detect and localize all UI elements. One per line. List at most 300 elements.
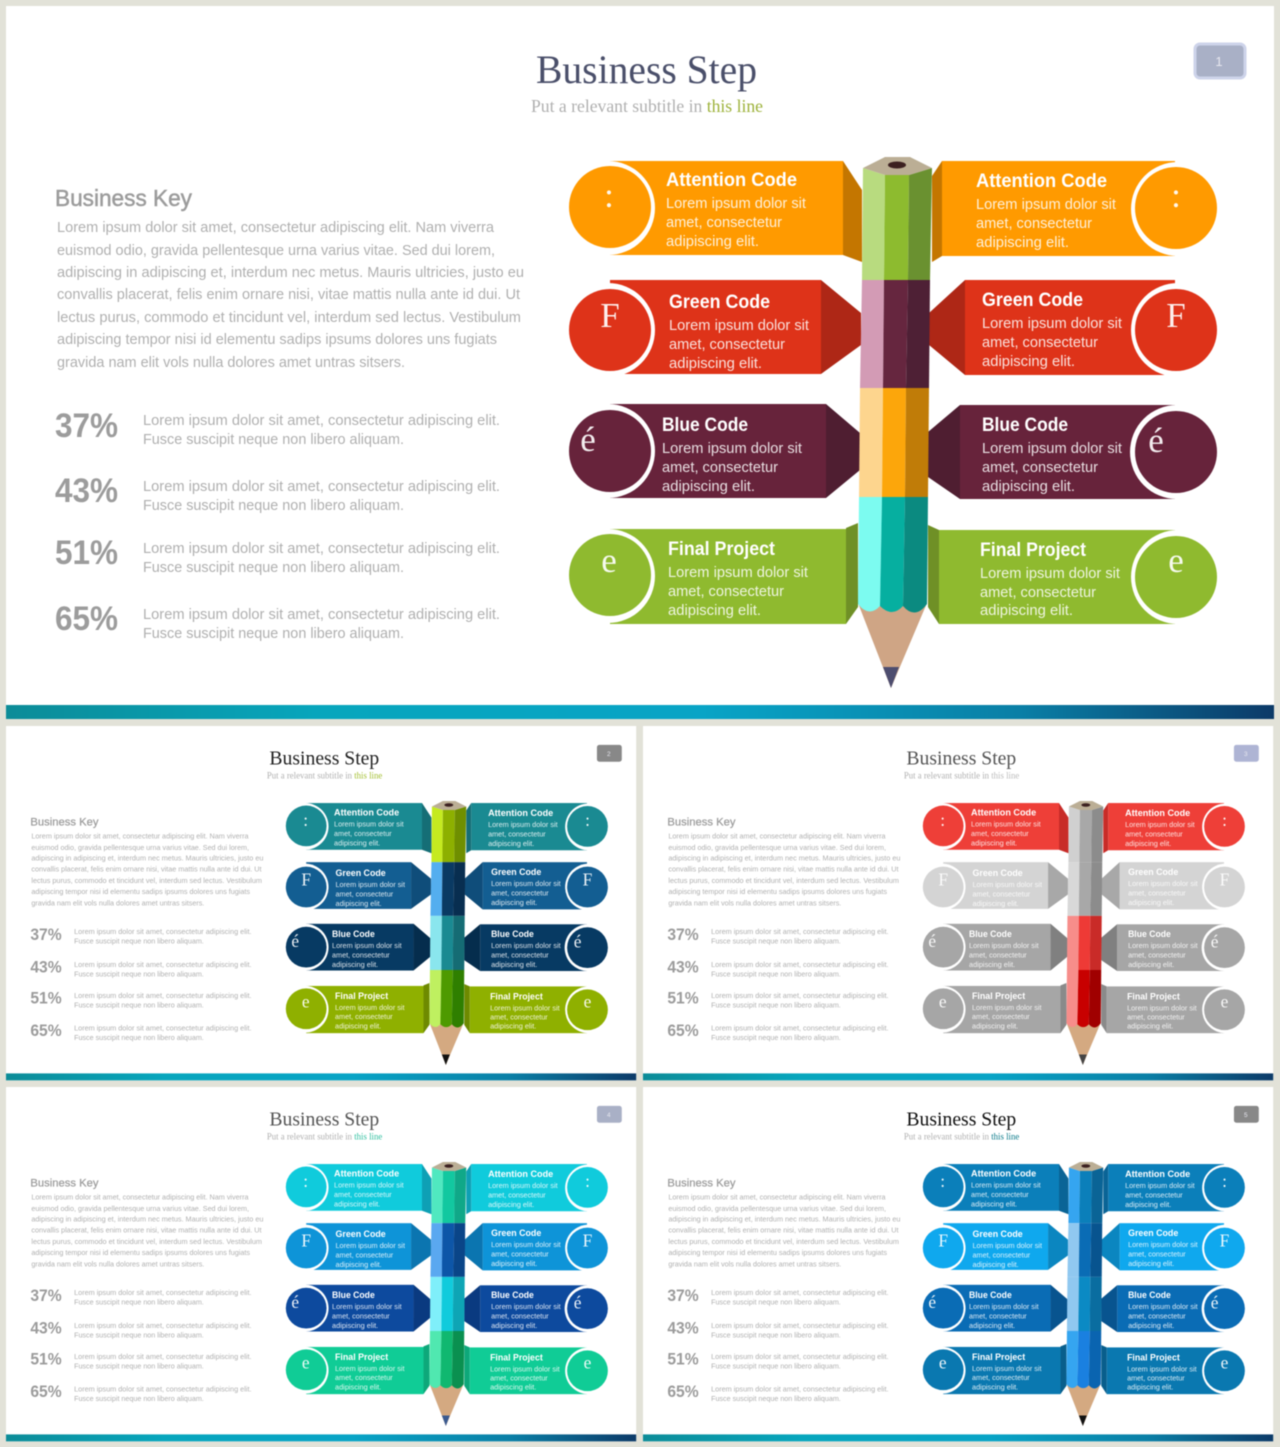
stat 37%: Fusce suscipit neque non libero aliquam. [711, 1298, 841, 1307]
stat 37%: Lorem ipsum dolor sit amet, consectetur adipiscing elit. [74, 1288, 252, 1297]
pencil [1066, 1162, 1103, 1426]
stat 43%: Lorem ipsum dolor sit amet, consectetur adipiscing elit. [711, 1321, 889, 1330]
main slide [6, 6, 1274, 719]
banner left: attention code: Attention Code [666, 170, 797, 191]
business key paragraph: euismod odio, gravida pellentesque urna varius vitae. Sed dui lorem, [668, 1204, 886, 1213]
stat 37% [30, 1286, 252, 1307]
banner left: blue code: Lorem ipsum dolor sit [969, 941, 1039, 950]
business key paragraph: lectus purus, commodo et tincidunt vel, interdum sed lectus. Vestibulum [668, 1237, 899, 1246]
stat 51%: 51% [667, 1349, 699, 1368]
banner left: green code: Lorem ipsum dolor sit [336, 1241, 405, 1250]
banner left: final project: amet, consectetur [668, 584, 784, 600]
stat 43%: Lorem ipsum dolor sit amet, consectetur adipiscing elit. [143, 479, 500, 495]
title: Business Step [269, 1108, 379, 1130]
banner right: attention code: amet, consectetur [1125, 1190, 1183, 1199]
banner right: final project: Lorem ipsum dolor sit [1127, 1364, 1197, 1373]
business key paragraph: lectus purus, commodo et tincidunt vel, interdum sed lectus. Vestibulum [57, 310, 521, 326]
banner left: attention code: amet, consectetur [334, 1190, 392, 1199]
stat 37%: Lorem ipsum dolor sit amet, consectetur adipiscing elit. [74, 927, 252, 936]
stat 65%: Lorem ipsum dolor sit amet, consectetur adipiscing elit. [711, 1024, 889, 1033]
stat 43% [667, 1319, 889, 1339]
banner left: green code [282, 862, 431, 910]
stat 37%: Fusce suscipit neque non libero aliquam. [74, 1298, 204, 1307]
subtitle: Put a relevant subtitle in this line [531, 96, 763, 116]
banner left: final project: amet, consectetur [972, 1012, 1030, 1021]
banner left: green code: Green Code [669, 292, 770, 313]
business key paragraph: convallis placerat, felis enim ornare nisi, vitae mattis nulla ante id dui. Ut [668, 865, 898, 874]
pencil [429, 801, 466, 1065]
banner right: final project: Final Project [980, 540, 1087, 561]
banner right: final project: adipiscing elit. [980, 603, 1073, 619]
stat 51%: Fusce suscipit neque non libero aliquam. [711, 1361, 841, 1370]
stat 37%: 37% [30, 925, 62, 944]
banner left: green code: adipiscing elit. [336, 1260, 382, 1269]
page badge [1234, 1106, 1259, 1123]
banner left: green code: F [301, 1232, 311, 1251]
business key heading: Business Key [667, 816, 736, 828]
business key paragraph: Lorem ipsum dolor sit amet, consectetur adipiscing elit. Nam viverra [668, 1192, 886, 1201]
banner left: green code: adipiscing elit. [669, 356, 762, 372]
banner right: green code: amet, consectetur [491, 1249, 549, 1258]
stat 43% [667, 958, 889, 978]
banner right: green code: F [1166, 296, 1186, 335]
stat 51% [30, 988, 252, 1009]
banner right: attention code [932, 161, 1225, 262]
business key paragraph: convallis placerat, felis enim ornare nisi, vitae mattis nulla ante id dui. Ut [31, 865, 261, 874]
page badge [597, 1106, 622, 1123]
banner left: blue code [282, 924, 430, 971]
business key paragraph: adipiscing tempor nisi id elementu sadips ipsums dolores uns fugiats [31, 1248, 250, 1257]
stat 51% [667, 988, 889, 1009]
banner left: attention code [919, 803, 1068, 853]
banner left: attention code: : [940, 811, 945, 830]
stat 65% [30, 1021, 252, 1042]
business key paragraph: adipiscing tempor nisi id elementu sadips ipsums dolores uns fugiats [31, 887, 250, 896]
banner left: attention code: Attention Code [971, 1168, 1036, 1179]
banner left: green code: Lorem ipsum dolor sit [336, 880, 405, 889]
banner right: attention code: amet, consectetur [488, 829, 546, 838]
banner left: blue code [282, 1285, 430, 1332]
banner right: green code [1102, 862, 1249, 910]
stat 51%: 51% [667, 988, 699, 1007]
stat 37%: 37% [667, 925, 699, 944]
mini slide: cyan and mint [6, 1087, 636, 1441]
banner right: final project: Final Project [1127, 991, 1181, 1002]
stat 43%: 43% [55, 472, 118, 510]
banner right: attention code: amet, consectetur [488, 1190, 546, 1199]
banner right: green code: adipiscing elit. [491, 898, 537, 907]
banner left: green code [282, 1223, 431, 1271]
banner left: blue code [919, 924, 1067, 971]
banner right: final project: adipiscing elit. [490, 1383, 536, 1392]
stat 51%: Fusce suscipit neque non libero aliquam. [711, 1000, 841, 1009]
banner right: final project: amet, consectetur [490, 1013, 548, 1022]
banner right: attention code: Lorem ipsum dolor sit [1125, 1181, 1195, 1190]
stat 51% [55, 534, 500, 576]
banner left: final project: e [302, 1353, 310, 1372]
banner right: final project: amet, consectetur [1127, 1374, 1185, 1383]
banner left: final project: adipiscing elit. [972, 1383, 1018, 1392]
stat 51%: Lorem ipsum dolor sit amet, consectetur adipiscing elit. [74, 1352, 252, 1361]
banner right: green code: Green Code [982, 290, 1083, 311]
stat 37% [30, 925, 252, 946]
banner left: blue code: Lorem ipsum dolor sit [332, 1302, 402, 1311]
banner right: blue code: Lorem ipsum dolor sit [1128, 941, 1198, 950]
business key paragraph: lectus purus, commodo et tincidunt vel, interdum sed lectus. Vestibulum [31, 1237, 262, 1246]
banner left: attention code: adipiscing elit. [971, 838, 1017, 847]
footer bar [6, 1073, 636, 1080]
banner right: blue code: é [1211, 1294, 1219, 1313]
banner right: green code [1102, 1223, 1249, 1271]
banner right: blue code: Blue Code [1128, 929, 1171, 940]
banner left: green code: F [938, 1232, 948, 1251]
stat 65%: Lorem ipsum dolor sit amet, consectetur adipiscing elit. [74, 1385, 252, 1394]
business key paragraph: Lorem ipsum dolor sit amet, consectetur adipiscing elit. Nam viverra [31, 831, 249, 840]
banner left: final project: e [601, 541, 617, 580]
banner left: attention code [561, 161, 862, 262]
banner right: attention code [466, 803, 612, 853]
title: Business Step [906, 1108, 1016, 1130]
business key paragraph: convallis placerat, felis enim ornare nisi, vitae mattis nulla ante id dui. Ut [57, 287, 520, 303]
banner right: green code: Lorem ipsum dolor sit [982, 316, 1122, 332]
banner right: attention code: adipiscing elit. [488, 839, 534, 848]
stat 37%: Lorem ipsum dolor sit amet, consectetur adipiscing elit. [711, 927, 889, 936]
banner left: attention code: amet, consectetur [971, 1190, 1029, 1199]
banner right: final project: Final Project [1127, 1352, 1181, 1363]
stat 37%: Lorem ipsum dolor sit amet, consectetur adipiscing elit. [711, 1288, 889, 1297]
stat 65%: Fusce suscipit neque non libero aliquam. [74, 1033, 204, 1042]
stat 51% [30, 1349, 252, 1370]
business key paragraph: adipiscing in adipiscing et, interdum nec metus. Mauris ultricies, justo eu [57, 265, 524, 281]
banner right: blue code: é [574, 933, 582, 952]
banner right: attention code: amet, consectetur [976, 216, 1092, 232]
banner left: final project: Lorem ipsum dolor sit [668, 565, 808, 581]
banner right: attention code: Attention Code [1125, 808, 1190, 819]
banner left: final project: Final Project [668, 539, 776, 560]
banner right: blue code: é [1148, 421, 1164, 460]
banner right: final project: Lorem ipsum dolor sit [490, 1364, 560, 1373]
stat 65% [667, 1021, 889, 1042]
subtitle: Put a relevant subtitle in this line [267, 771, 382, 781]
banner left: green code: Lorem ipsum dolor sit [973, 880, 1042, 889]
banner right: blue code: Blue Code [491, 1290, 534, 1301]
stat 65% [667, 1382, 889, 1403]
banner left: blue code: é [928, 932, 936, 951]
stat 65% [55, 600, 500, 642]
banner right: attention code: adipiscing elit. [1125, 1200, 1171, 1209]
banner left: attention code: Attention Code [334, 807, 399, 818]
banner right: final project: Final Project [490, 1352, 544, 1363]
banner left: final project [561, 523, 858, 624]
business key paragraph: adipiscing in adipiscing et, interdum nec metus. Mauris ultricies, justo eu [31, 1215, 263, 1224]
banner left: final project: Lorem ipsum dolor sit [972, 1003, 1042, 1012]
business key heading: Business Key [30, 816, 99, 828]
banner right: green code: amet, consectetur [982, 335, 1098, 351]
banner right: blue code: adipiscing elit. [491, 1321, 537, 1330]
banner left: blue code: amet, consectetur [662, 460, 778, 476]
stat 65%: 65% [30, 1382, 62, 1401]
business key paragraph: gravida nam elit vols nulla dolores amet untras sitsers. [31, 898, 204, 907]
banner right: attention code: Attention Code [488, 808, 553, 819]
banner right: final project: adipiscing elit. [1127, 1022, 1173, 1031]
banner right: blue code: adipiscing elit. [491, 960, 537, 969]
banner right: green code [929, 280, 1225, 377]
page badge: 2 [607, 751, 611, 758]
banner left: blue code: adipiscing elit. [332, 1321, 378, 1330]
stat 51%: 51% [30, 988, 62, 1007]
stat 37% [667, 925, 889, 946]
business key paragraph: Lorem ipsum dolor sit amet, consectetur adipiscing elit. Nam viverra [31, 1192, 249, 1201]
banner left: green code [919, 862, 1068, 910]
banner left: final project [282, 1344, 429, 1394]
banner left: attention code [919, 1164, 1068, 1214]
banner left: blue code: amet, consectetur [332, 1312, 390, 1321]
banner right: attention code: : [1222, 1172, 1227, 1191]
business key paragraph: adipiscing tempor nisi id elementu sadips ipsums dolores uns fugiats [57, 332, 497, 348]
mini slide: red and grey [643, 726, 1273, 1080]
banner left: blue code [919, 1285, 1067, 1332]
stat 51%: Lorem ipsum dolor sit amet, consectetur adipiscing elit. [143, 541, 500, 557]
page badge: 3 [1244, 751, 1248, 758]
banner right: final project: amet, consectetur [490, 1374, 548, 1383]
banner left: attention code: Lorem ipsum dolor sit [334, 1180, 404, 1189]
banner left: green code: adipiscing elit. [973, 899, 1019, 908]
stat 65%: 65% [667, 1382, 699, 1401]
banner left: attention code: Lorem ipsum dolor sit [334, 819, 404, 828]
stat 37%: Fusce suscipit neque non libero aliquam. [143, 432, 404, 448]
banner left: green code: adipiscing elit. [973, 1260, 1019, 1269]
banner right: blue code: amet, consectetur [491, 951, 549, 960]
title: Business Step [906, 747, 1016, 769]
banner right: green code: F [1220, 1232, 1230, 1251]
banner right: attention code: Lorem ipsum dolor sit [488, 1181, 558, 1190]
banner right: final project [464, 1345, 612, 1394]
business key paragraph: euismod odio, gravida pellentesque urna varius vitae. Sed dui lorem, [31, 843, 249, 852]
banner right: blue code [464, 924, 611, 971]
banner left: attention code [282, 803, 431, 853]
banner right: final project: e [584, 992, 592, 1011]
banner right: attention code [1103, 1164, 1249, 1214]
stat 43%: Fusce suscipit neque non libero aliquam. [74, 969, 204, 978]
banner left: green code: Green Code [336, 868, 386, 879]
business key paragraph: convallis placerat, felis enim ornare nisi, vitae mattis nulla ante id dui. Ut [668, 1226, 898, 1235]
banner right: blue code [1101, 1285, 1248, 1332]
banner right: final project: e [584, 1353, 592, 1372]
page badge [597, 745, 622, 762]
stat 37%: 37% [30, 1286, 62, 1305]
banner right: attention code: Lorem ipsum dolor sit [488, 820, 558, 829]
banner right: final project [1101, 984, 1249, 1033]
mini slide: teal and navy [6, 726, 636, 1080]
banner right: green code: Lorem ipsum dolor sit [491, 879, 561, 888]
banner left: final project [919, 983, 1066, 1033]
banner left: green code: amet, consectetur [669, 337, 785, 353]
stat 37% [667, 1286, 889, 1307]
banner left: attention code: amet, consectetur [334, 829, 392, 838]
banner left: green code: amet, consectetur [973, 1250, 1031, 1259]
banner right: blue code [1101, 924, 1248, 971]
banner left: green code: F [301, 871, 311, 890]
banner left: blue code: adipiscing elit. [662, 479, 755, 495]
banner left: final project: Lorem ipsum dolor sit [335, 1364, 405, 1373]
stat 43%: Fusce suscipit neque non libero aliquam. [143, 498, 404, 514]
stat 43%: 43% [667, 1319, 699, 1338]
banner left: final project: adipiscing elit. [972, 1022, 1018, 1031]
subtitle: Put a relevant subtitle in this line [904, 1132, 1019, 1142]
business key paragraph: adipiscing in adipiscing et, interdum nec metus. Mauris ultricies, justo eu [668, 1215, 900, 1224]
banner right: blue code: Lorem ipsum dolor sit [491, 1302, 561, 1311]
banner right: final project [928, 525, 1225, 624]
stat 65%: Lorem ipsum dolor sit amet, consectetur adipiscing elit. [74, 1024, 252, 1033]
banner right: blue code: Lorem ipsum dolor sit [1128, 1302, 1198, 1311]
stat 37%: Fusce suscipit neque non libero aliquam. [711, 937, 841, 946]
banner right: attention code: amet, consectetur [1125, 829, 1183, 838]
stat 43%: 43% [667, 958, 699, 977]
banner right: green code: amet, consectetur [491, 888, 549, 897]
mini slide: blues [643, 1087, 1273, 1441]
business key paragraph: gravida nam elit vols nulla dolores amet untras sitsers. [668, 1259, 841, 1268]
banner left: green code: Green Code [973, 1229, 1023, 1240]
banner left: attention code: Lorem ipsum dolor sit [666, 196, 806, 212]
banner right: attention code: adipiscing elit. [976, 235, 1069, 251]
stat 65%: Fusce suscipit neque non libero aliquam. [143, 626, 404, 642]
banner left: attention code: adipiscing elit. [666, 234, 759, 250]
banner left: blue code: Lorem ipsum dolor sit [969, 1302, 1039, 1311]
stat 37% [55, 407, 500, 448]
banner left: blue code: Blue Code [969, 929, 1012, 940]
banner right: final project: e [1221, 992, 1229, 1011]
banner left: blue code: é [291, 932, 299, 951]
stat 51% [667, 1349, 889, 1370]
stat 51%: Fusce suscipit neque non libero aliquam. [74, 1361, 204, 1370]
subtitle: Put a relevant subtitle in this line [904, 771, 1019, 781]
banner right: final project [464, 984, 612, 1033]
banner left: blue code: adipiscing elit. [969, 1321, 1015, 1330]
banner left: attention code: : [303, 811, 308, 830]
stat 43% [30, 958, 252, 978]
title: Business Step [269, 747, 379, 769]
banner right: blue code: Lorem ipsum dolor sit [491, 941, 561, 950]
pencil [1066, 801, 1103, 1065]
banner left: attention code: Attention Code [334, 1168, 399, 1179]
stat 51%: Fusce suscipit neque non libero aliquam. [143, 560, 404, 576]
stat 65%: 65% [55, 600, 118, 638]
business key paragraph: gravida nam elit vols nulla dolores amet untras sitsers. [57, 355, 405, 371]
stat 43%: Lorem ipsum dolor sit amet, consectetur adipiscing elit. [74, 960, 252, 969]
banner right: blue code [928, 405, 1224, 499]
stat 43%: Lorem ipsum dolor sit amet, consectetur adipiscing elit. [711, 960, 889, 969]
banner right: green code: Lorem ipsum dolor sit [1128, 879, 1198, 888]
banner right: green code: adipiscing elit. [1128, 1259, 1174, 1268]
banner right: green code: adipiscing elit. [1128, 898, 1174, 907]
stat 65%: Fusce suscipit neque non libero aliquam. [711, 1394, 841, 1403]
business key paragraph: adipiscing in adipiscing et, interdum nec metus. Mauris ultricies, justo eu [31, 854, 263, 863]
banner left: blue code [561, 404, 860, 498]
stat 43%: Fusce suscipit neque non libero aliquam. [711, 1330, 841, 1339]
banner right: green code: Green Code [491, 1228, 541, 1239]
business key paragraph: adipiscing in adipiscing et, interdum nec metus. Mauris ultricies, justo eu [668, 854, 900, 863]
pencil [429, 1162, 466, 1426]
banner right: green code: adipiscing elit. [982, 354, 1075, 370]
banner right: green code: Green Code [491, 867, 541, 878]
stat 51%: Lorem ipsum dolor sit amet, consectetur adipiscing elit. [711, 1352, 889, 1361]
stat 43%: 43% [30, 1319, 62, 1338]
subtitle: Put a relevant subtitle in this line [267, 1132, 382, 1142]
banner right: attention code: : [585, 811, 590, 830]
banner left: green code: F [600, 296, 620, 335]
banner left: blue code: amet, consectetur [332, 951, 390, 960]
banner right: attention code [466, 1164, 612, 1214]
banner right: final project: Lorem ipsum dolor sit [1127, 1003, 1197, 1012]
banner right: blue code: Blue Code [982, 415, 1068, 436]
banner right: blue code: é [574, 1294, 582, 1313]
banner left: attention code: Lorem ipsum dolor sit [971, 819, 1041, 828]
page badge [1234, 745, 1259, 762]
banner right: blue code: adipiscing elit. [1128, 1321, 1174, 1330]
banner left: green code: amet, consectetur [973, 889, 1031, 898]
banner right: blue code: amet, consectetur [1128, 951, 1186, 960]
banner left: final project: adipiscing elit. [335, 1022, 381, 1031]
banner right: attention code: Lorem ipsum dolor sit [976, 197, 1116, 213]
banner left: final project: adipiscing elit. [668, 603, 761, 619]
business key paragraph: euismod odio, gravida pellentesque urna varius vitae. Sed dui lorem, [668, 843, 886, 852]
banner right: green code: Green Code [1128, 1228, 1178, 1239]
stat 37%: 37% [667, 1286, 699, 1305]
stat 37%: Fusce suscipit neque non libero aliquam. [74, 937, 204, 946]
stat 37%: 37% [55, 407, 118, 445]
banner left: green code: amet, consectetur [336, 1250, 394, 1259]
banner right: green code: F [583, 1232, 593, 1251]
stat 43% [55, 472, 500, 514]
banner left: attention code: : [604, 176, 614, 215]
banner right: attention code: : [585, 1172, 590, 1191]
stat 65%: Lorem ipsum dolor sit amet, consectetur adipiscing elit. [711, 1385, 889, 1394]
stat 43% [30, 1319, 252, 1339]
banner left: attention code: : [940, 1172, 945, 1191]
banner left: final project [919, 1344, 1066, 1394]
stat 51%: Lorem ipsum dolor sit amet, consectetur adipiscing elit. [711, 991, 889, 1000]
banner left: green code: F [938, 871, 948, 890]
banner left: blue code: Blue Code [662, 415, 748, 436]
banner left: final project: amet, consectetur [335, 1373, 393, 1382]
stat 65%: Lorem ipsum dolor sit amet, consectetur adipiscing elit. [143, 607, 500, 623]
banner right: green code [465, 862, 612, 910]
footer bar [6, 1434, 636, 1441]
pencil [858, 157, 932, 688]
stat 43%: Fusce suscipit neque non libero aliquam. [711, 969, 841, 978]
banner right: final project: adipiscing elit. [1127, 1383, 1173, 1392]
banner right: blue code: amet, consectetur [1128, 1312, 1186, 1321]
stat 43%: 43% [30, 958, 62, 977]
title: Business Step [536, 47, 757, 92]
banner right: green code [465, 1223, 612, 1271]
banner left: attention code [282, 1164, 431, 1214]
stat 51%: Fusce suscipit neque non libero aliquam. [74, 1000, 204, 1009]
banner right: final project: amet, consectetur [1127, 1013, 1185, 1022]
banner left: final project: Final Project [972, 1352, 1026, 1363]
banner right: blue code: amet, consectetur [491, 1312, 549, 1321]
banner right: attention code: Attention Code [488, 1169, 553, 1180]
page badge [1195, 44, 1245, 78]
banner left: blue code: é [291, 1293, 299, 1312]
business key paragraph: convallis placerat, felis enim ornare nisi, vitae mattis nulla ante id dui. Ut [31, 1226, 261, 1235]
banner left: green code: adipiscing elit. [336, 899, 382, 908]
banner right: attention code [1103, 803, 1249, 853]
business key paragraph: adipiscing tempor nisi id elementu sadips ipsums dolores uns fugiats [668, 1248, 887, 1257]
banner left: attention code: Attention Code [971, 807, 1036, 818]
banner left: attention code: amet, consectetur [971, 829, 1029, 838]
business key paragraph: lectus purus, commodo et tincidunt vel, interdum sed lectus. Vestibulum [31, 876, 262, 885]
